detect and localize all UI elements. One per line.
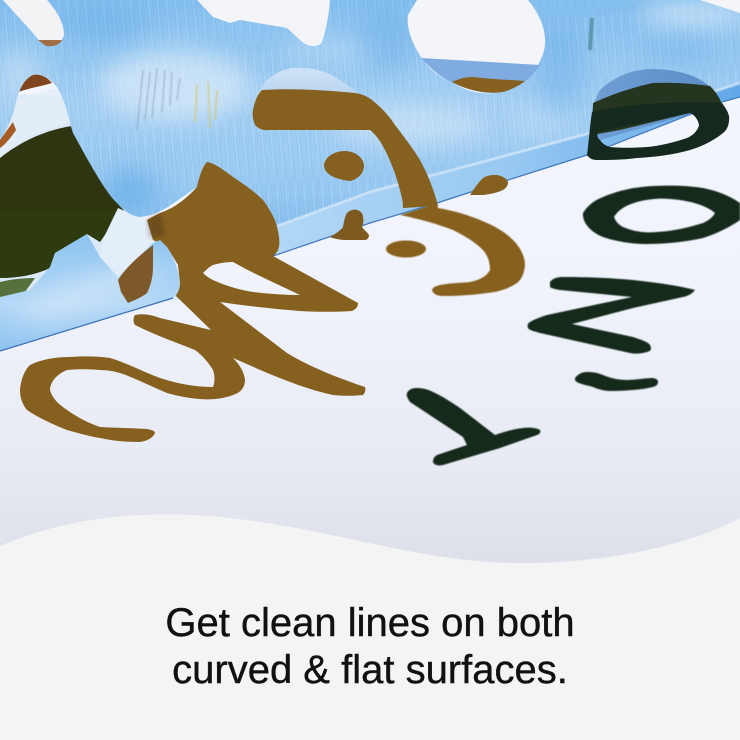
i dot on stencil <box>324 151 364 181</box>
paint seen through left hole: dark green <box>0 126 125 278</box>
lower-left stencil flap <box>0 234 180 351</box>
hole: top centre <box>197 0 330 46</box>
pale brush patches <box>0 1 740 145</box>
upper blue stencil sheet <box>0 0 740 256</box>
letter T <box>407 388 540 465</box>
hole: letter j upper stroke <box>253 68 438 208</box>
apostrophe <box>575 372 658 391</box>
dot <box>386 240 426 258</box>
lettering on the surface <box>407 186 740 465</box>
small brown notch centre <box>330 210 369 240</box>
j tail <box>400 203 525 296</box>
paint flecks <box>137 18 592 130</box>
top-right corner highlight <box>700 0 740 13</box>
fold band <box>273 83 740 256</box>
brown paint streak on flap <box>118 245 153 303</box>
hole: top round <box>408 0 545 93</box>
hole: top left <box>3 0 64 46</box>
caption text: curved & flat surfaces. <box>172 648 568 692</box>
small brown notch right <box>470 175 508 195</box>
brown script letter <box>20 162 365 442</box>
painted white surface <box>0 0 740 570</box>
letter O <box>583 186 740 244</box>
bottom caption band <box>0 514 740 740</box>
hole: letter D <box>587 69 729 160</box>
paint seen through left hole: brown top <box>18 74 52 92</box>
saturated streaks <box>55 3 720 212</box>
caption text: Get clean lines on both <box>165 601 575 645</box>
letter N <box>528 277 695 354</box>
caption text <box>165 601 575 692</box>
hole background, lower left <box>0 95 180 300</box>
paint seen through left hole: brown sliver <box>0 122 16 148</box>
